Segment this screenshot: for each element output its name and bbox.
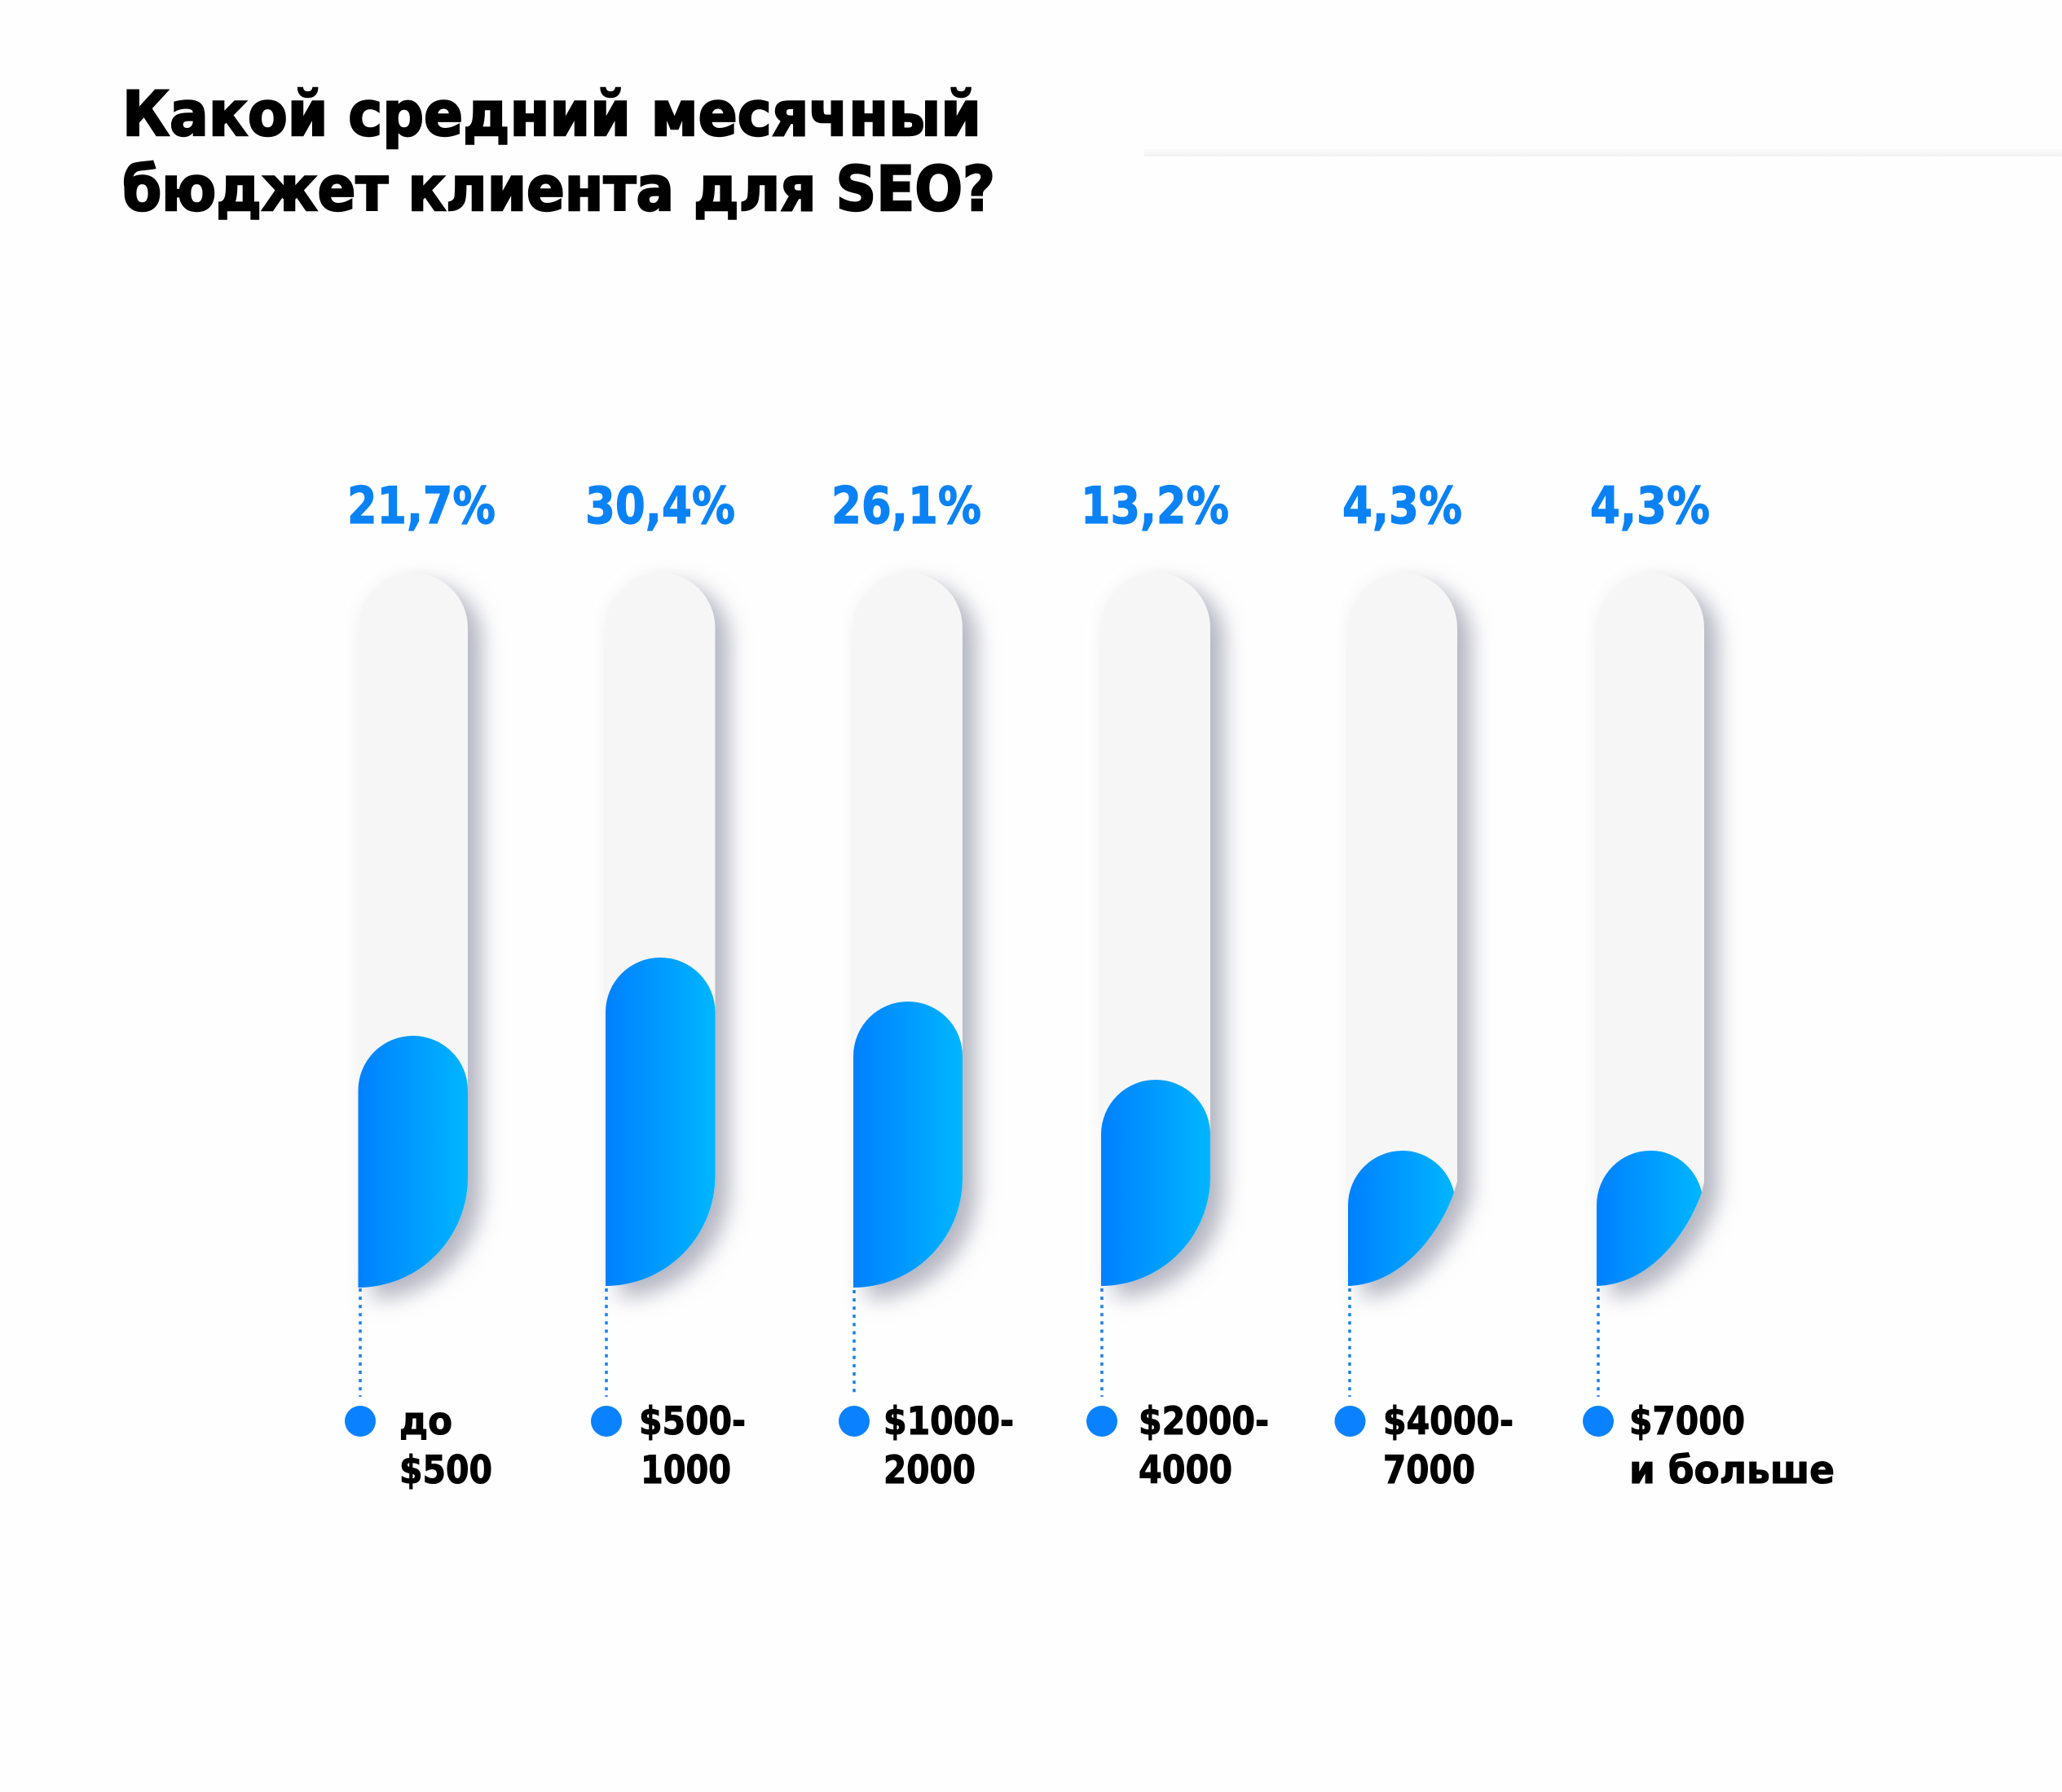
label: $2000- bbox=[1139, 1399, 1269, 1444]
column: $500-1000 bbox=[585, 476, 746, 1493]
track bbox=[606, 573, 716, 1286]
marker dot bbox=[1335, 1406, 1366, 1437]
label: до bbox=[399, 1399, 452, 1444]
track bbox=[359, 573, 468, 1288]
label: $500 bbox=[399, 1448, 492, 1493]
fill bar bbox=[1597, 1151, 1702, 1286]
value: 21,7%: 21,7% bbox=[347, 476, 496, 535]
value: 26,1%: 26,1% bbox=[831, 476, 981, 535]
label bbox=[399, 1399, 492, 1493]
track bbox=[1101, 573, 1210, 1286]
title: бюджет клиента для SEO? bbox=[122, 152, 995, 225]
label bbox=[1383, 1399, 1513, 1493]
title: Какой средний месячный bbox=[122, 77, 981, 150]
marker dot bbox=[839, 1406, 870, 1437]
label bbox=[1629, 1399, 1835, 1493]
value: 13,2%: 13,2% bbox=[1081, 476, 1229, 535]
label: $7000 bbox=[1629, 1399, 1745, 1444]
label: 4000 bbox=[1139, 1448, 1232, 1493]
track bbox=[1597, 573, 1704, 1286]
dotted leader bbox=[605, 1288, 608, 1397]
value: 30,4%: 30,4% bbox=[585, 476, 735, 535]
label bbox=[1139, 1399, 1269, 1493]
title bbox=[122, 77, 995, 225]
fill bar bbox=[1101, 1080, 1210, 1286]
label bbox=[639, 1399, 746, 1493]
label bbox=[883, 1399, 1014, 1493]
column: $1000-2000 bbox=[831, 476, 1014, 1493]
track bbox=[853, 573, 963, 1288]
column: до $500 bbox=[345, 476, 496, 1493]
marker dot bbox=[1583, 1406, 1614, 1437]
label: 1000 bbox=[641, 1448, 731, 1493]
dotted leader bbox=[1348, 1288, 1351, 1397]
label: $4000- bbox=[1383, 1399, 1513, 1444]
value: 4,3%: 4,3% bbox=[1590, 476, 1710, 535]
fill bar bbox=[1348, 1151, 1454, 1286]
column: $2000-4000 bbox=[1081, 476, 1269, 1493]
top-right rule bbox=[1144, 149, 2062, 156]
fill bar bbox=[359, 1036, 468, 1288]
label: $500- bbox=[639, 1399, 746, 1444]
label: и больше bbox=[1629, 1448, 1835, 1493]
dotted leader bbox=[1597, 1288, 1600, 1397]
track bbox=[1348, 573, 1457, 1286]
dotted leader bbox=[1100, 1288, 1104, 1397]
label: $1000- bbox=[883, 1399, 1014, 1444]
fill bar bbox=[606, 958, 716, 1286]
marker dot bbox=[591, 1406, 622, 1437]
column: $4000-7000 bbox=[1335, 476, 1513, 1493]
column: $7000 и больше bbox=[1583, 476, 1835, 1493]
label: 2000 bbox=[883, 1448, 976, 1493]
fill bar bbox=[853, 1002, 963, 1288]
marker dot bbox=[1086, 1406, 1117, 1437]
label: 7000 bbox=[1383, 1448, 1475, 1493]
value: 4,3%: 4,3% bbox=[1342, 476, 1462, 535]
dotted leader bbox=[359, 1288, 362, 1397]
dotted leader bbox=[853, 1290, 856, 1397]
marker dot bbox=[345, 1406, 376, 1437]
